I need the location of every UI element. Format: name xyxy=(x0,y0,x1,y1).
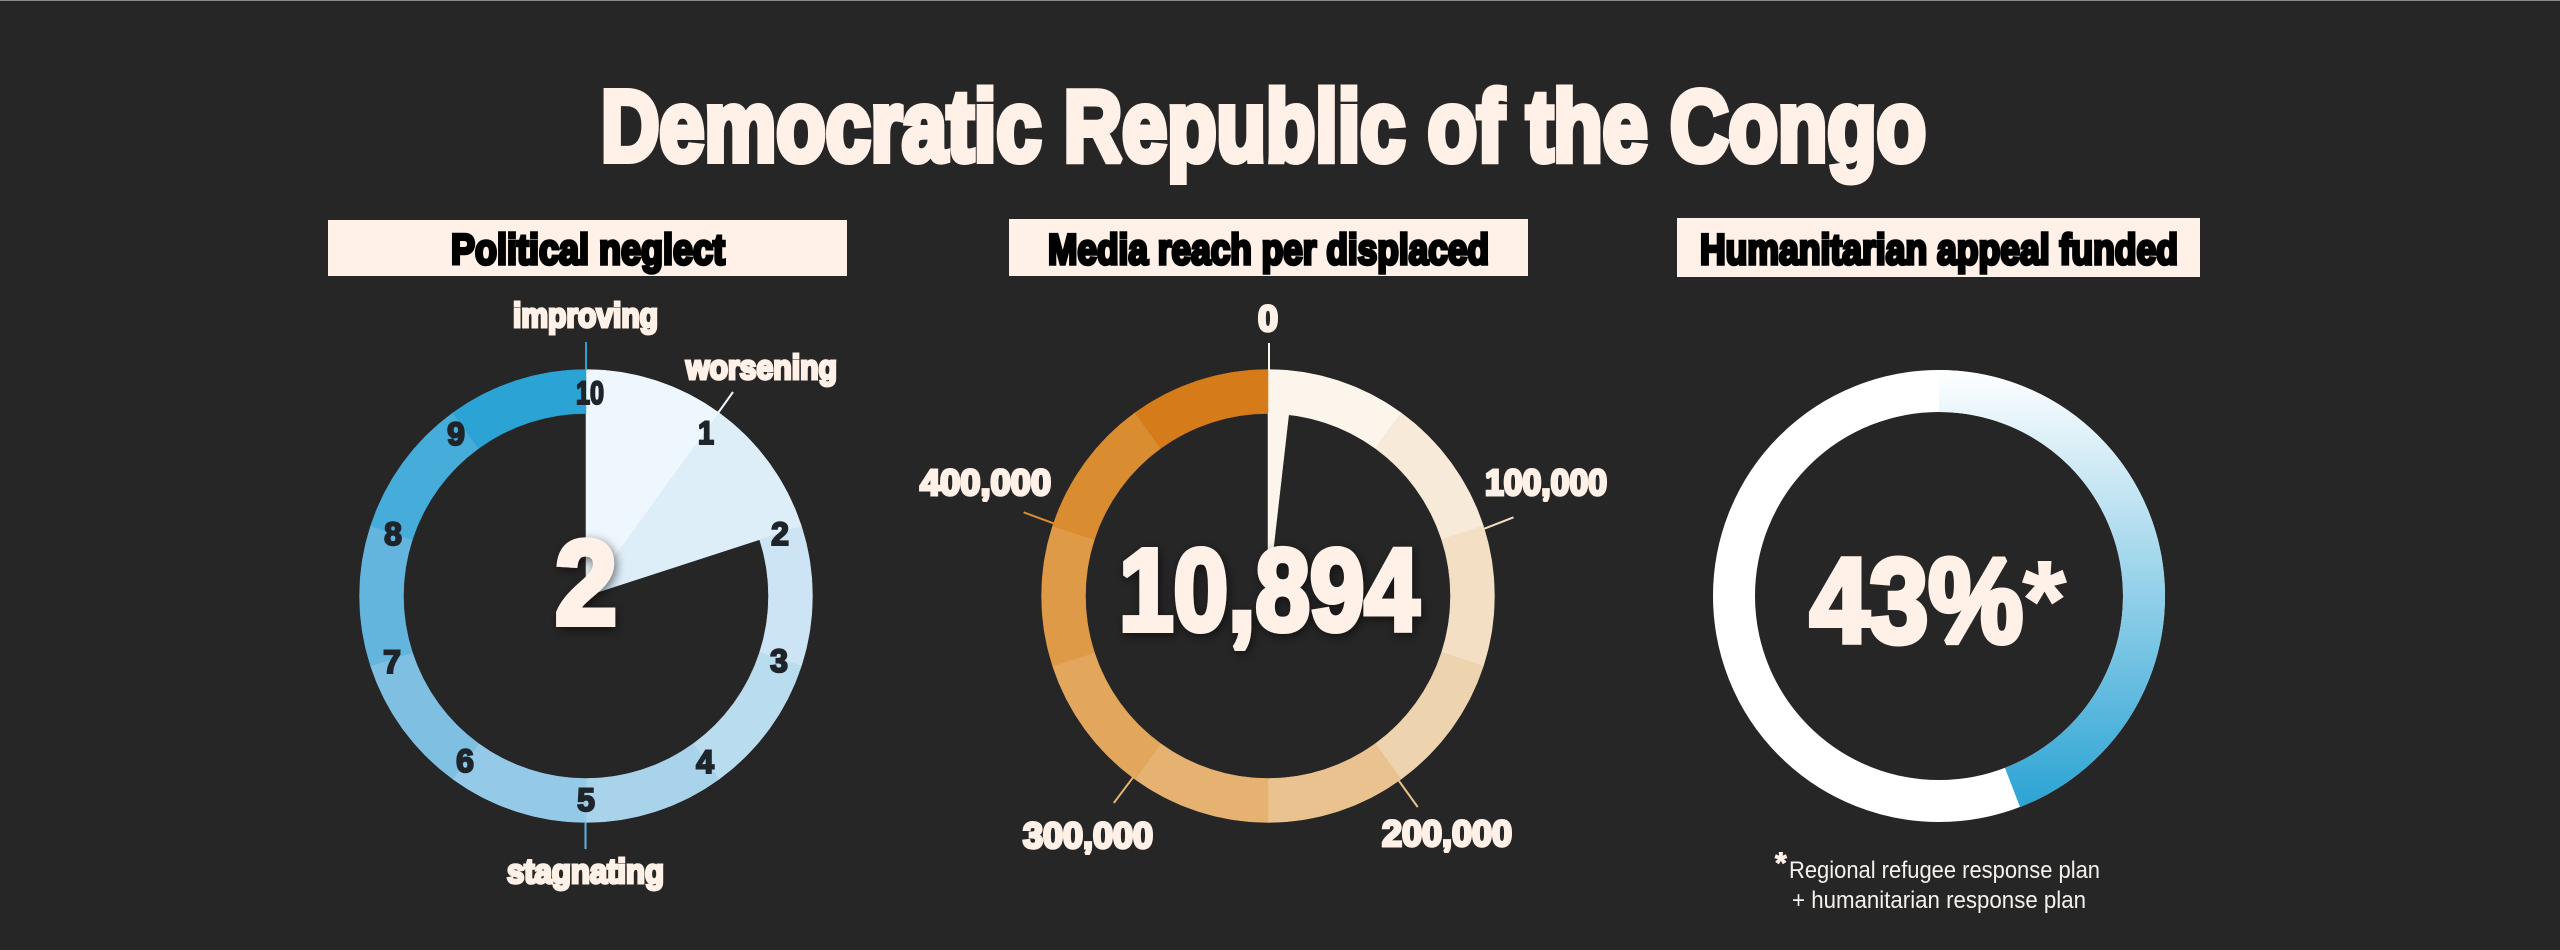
scale numbers: 10 xyxy=(576,375,604,411)
scale numbers: 2 xyxy=(771,516,789,552)
scale numbers: 6 xyxy=(456,743,474,779)
heading: humanitarian appeal funded: Humanitarian appeal funded xyxy=(1700,226,2178,274)
dial: media reach scale xyxy=(1042,370,1494,822)
label: stagnating: stagnating xyxy=(507,853,664,891)
heading: political neglect xyxy=(328,220,847,276)
label: worsening: worsening xyxy=(685,349,837,387)
label: 100,000: 100,000 xyxy=(1485,462,1607,503)
label: 400,000: 400,000 xyxy=(920,462,1051,503)
footnote: + humanitarian response plan xyxy=(1792,887,2086,914)
heading: political neglect: Political neglect xyxy=(451,226,725,274)
scale numbers: 1 xyxy=(698,415,714,451)
scale numbers: 9 xyxy=(447,416,465,452)
label: 300,000: 300,000 xyxy=(1023,815,1153,856)
panel: media reach xyxy=(920,219,1607,856)
panel: humanitarian appeal xyxy=(1677,218,2200,914)
scale numbers: 7 xyxy=(383,644,401,680)
heading: media reach per displaced: Media reach per displaced xyxy=(1048,226,1489,274)
label: 0: 0 xyxy=(1258,298,1278,339)
scale numbers: 4 xyxy=(696,744,714,780)
scale numbers xyxy=(383,375,789,818)
scale numbers: 5 xyxy=(577,782,595,818)
label: 200,000: 200,000 xyxy=(1382,813,1512,854)
label: improving: improving xyxy=(513,297,658,335)
scale numbers: 8 xyxy=(384,516,402,552)
value: 43%*: * xyxy=(2023,539,2066,662)
panel: political neglect xyxy=(328,220,847,891)
scale ticks xyxy=(586,342,733,849)
footnote: * xyxy=(1775,847,1787,880)
scale numbers: 3 xyxy=(770,643,788,679)
footnote xyxy=(1775,847,2100,914)
value: 2: 2 xyxy=(555,516,617,650)
dial: political neglect scale xyxy=(360,370,812,822)
title: Democratic Republic of the Congo xyxy=(601,70,1926,182)
value: 10,894: 10,894 xyxy=(1119,525,1419,655)
value: 43%*: 43% xyxy=(1810,534,2023,668)
footnote: Regional refugee response plan xyxy=(1789,857,2100,884)
donut: 43% funded xyxy=(1734,370,2165,807)
heading: humanitarian appeal funded xyxy=(1677,218,2200,277)
scale ticks xyxy=(1024,343,1514,807)
